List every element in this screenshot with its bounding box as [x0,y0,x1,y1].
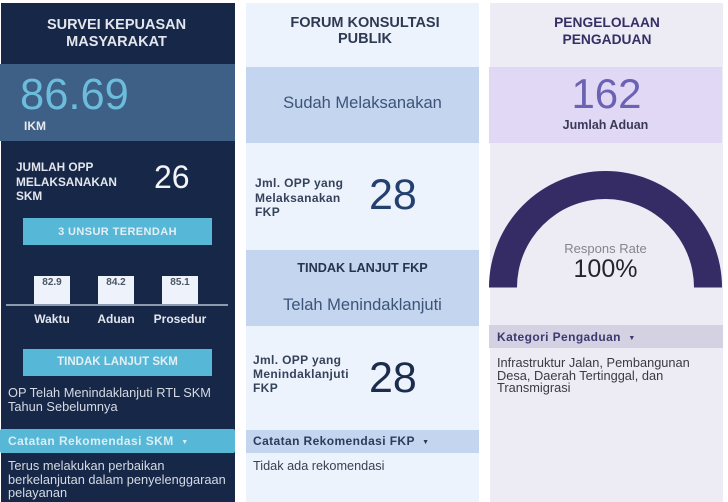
text: kategori pengaduan [497,355,690,395]
header: catatan rekomendasi SKM: Catatan Rekomendasi SKM ▼ [8,434,189,448]
heading: tindak lanjut FKP: TINDAK LANJUT FKP [297,261,428,275]
header: catatan rekomendasi SKM [0,429,235,453]
text: catatan rekomendasi FKP: Tidak ada rekomendasi [253,459,384,473]
value: 86.69: 86.69 [20,71,129,119]
text: catatan rekomendasi SKM: berkelanjutan dalam penyelenggaraan [8,472,226,487]
bar: aduan [98,276,134,305]
label: aduan: Aduan [97,312,135,326]
button: tindak lanjut SKM [23,349,212,376]
header: catatan rekomendasi FKP: Catatan Rekomendasi FKP ▼ [253,434,430,448]
label: waktu: Waktu [34,312,70,326]
label: jumlah OPP melaksanakan FKP [255,176,343,219]
bar: waktu [34,276,70,305]
value: 26: 26 [154,159,190,195]
band: tindak lanjut FKP [246,250,479,326]
bar: aduan: 84.2 [106,277,126,288]
heading: survei kepuasan masyarakat: MASYARAKAT [66,34,167,50]
label: jumlah OPP melaksanakan FKP: Jml. OPP yang [255,176,343,190]
label: IKM: IKM [24,119,46,133]
bar: prosedur [162,276,198,305]
panel: survei kepuasan masyarakat [1,3,235,502]
label: jumlah OPP menindaklanjuti FKP: FKP [253,381,278,395]
label: jumlah OPP melaksanakan SKM: MELAKSANAKAN [16,174,117,188]
heading: survei kepuasan masyarakat [47,17,186,50]
label: jumlah OPP melaksanakan FKP: Melaksanakan [255,190,341,204]
value: 28 menindaklanjuti: 28 [369,354,417,402]
text: tindak lanjut SKM: Tahun Sebelumnya [8,399,118,414]
text: catatan rekomendasi SKM [8,458,226,500]
label: jumlah aduan: Jumlah Aduan [563,118,648,132]
heading: pengelolaan pengaduan: PENGELOLAAN [554,15,660,30]
band: nilai IKM [0,64,235,141]
header: kategori pengaduan [489,325,723,348]
bar chart: 3 unsur terendah [6,276,228,326]
header: catatan rekomendasi FKP [246,430,479,453]
label: jumlah OPP melaksanakan FKP: FKP [255,205,280,219]
label: prosedur: Prosedur [154,312,206,326]
label: respons rate: Respons Rate [564,241,647,256]
text: tindak lanjut SKM [8,385,211,414]
label: jumlah OPP menindaklanjuti FKP: Menindaklanjuti [253,367,349,381]
gauge: respons rate [489,171,722,288]
heading: forum konsultasi publik: FORUM KONSULTASI [290,15,440,31]
label: jumlah OPP melaksanakan SKM: SKM [16,189,42,203]
value: 28 melaksanakan: 28 [369,171,417,219]
value: 162: 162 [571,70,642,117]
heading: forum konsultasi publik [290,15,440,47]
header: kategori pengaduan: Kategori Pengaduan ▼ [497,330,636,344]
text: kategori pengaduan: Infrastruktur Jalan, Pembangunan [497,355,690,370]
label: jumlah OPP melaksanakan SKM [16,160,117,203]
button: 3 unsur terendah: 3 UNSUR TERENDAH [58,226,177,238]
label: jumlah OPP menindaklanjuti FKP [253,353,349,395]
text: catatan rekomendasi SKM: pelayanan [8,485,67,500]
button: tindak lanjut SKM: TINDAK LANJUT SKM [57,356,178,368]
button: 3 unsur terendah [23,218,212,245]
band: status FKP [246,67,479,143]
bar: waktu: 82.9 [42,277,62,288]
text: catatan rekomendasi SKM: Terus melakukan perbaikan [8,458,164,473]
label: jumlah OPP melaksanakan SKM: JUMLAH OPP [16,160,93,174]
heading: pengelolaan pengaduan [554,15,660,47]
panel: pengelolaan pengaduan [490,3,723,502]
label: jumlah OPP menindaklanjuti FKP: Jml. OPP yang [253,353,341,367]
text: kategori pengaduan: Desa, Daerah Tertinggal, dan [497,368,663,382]
heading: forum konsultasi publik: PUBLIK [338,31,392,47]
panel: forum konsultasi publik [246,3,479,502]
band: status FKP: Sudah Melaksanakan [283,94,442,112]
bar: prosedur: 85.1 [170,277,190,288]
status: telah menindaklanjuti: Telah Menindaklanjuti [283,296,442,314]
value: 100%: 100% [574,255,637,283]
heading: survei kepuasan masyarakat: SURVEI KEPUASAN [47,17,186,33]
text: kategori pengaduan: Transmigrasi [497,380,570,395]
heading: pengelolaan pengaduan: PENGADUAN [563,32,651,47]
band: jumlah aduan [489,67,722,143]
text: tindak lanjut SKM: OP Telah Menindaklanjuti RTL SKM [8,385,211,400]
